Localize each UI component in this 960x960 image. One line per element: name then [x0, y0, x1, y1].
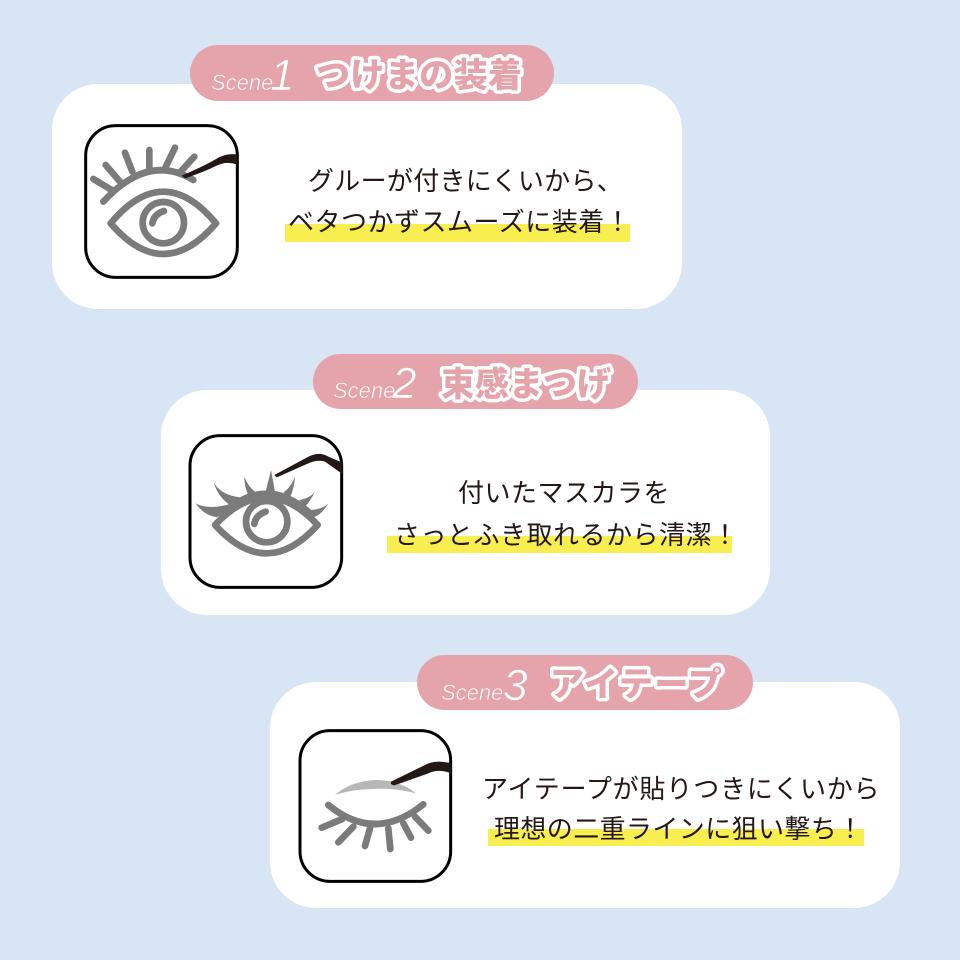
heading pill 2 [313, 354, 638, 409]
text block 2: 付いたマスカラを [458, 478, 670, 508]
panel: scene 1 [52, 45, 682, 309]
card 1 [52, 84, 682, 309]
panel: scene 3 [270, 655, 900, 908]
heading pill 1: つけまの装着 [316, 57, 522, 95]
heading pill 3: 3 [503, 661, 528, 710]
text block 1: グルーが付きにくいから、 [308, 166, 623, 196]
heading pill 3: Scene [441, 680, 503, 705]
icon: open eye with applicator [86, 126, 237, 277]
text block 3 [482, 774, 880, 846]
text block 1 [285, 166, 631, 242]
card 3 [270, 682, 900, 908]
heading pill 2: 束感まつげ [441, 365, 611, 404]
heading pill 3: アイテープ [550, 666, 722, 704]
heading pill 1 [190, 45, 554, 101]
heading pill 2: 2 [391, 359, 416, 408]
card 2 [161, 390, 770, 615]
panel: scene 2 [161, 354, 770, 615]
heading pill 2: Scene [333, 378, 395, 403]
text block 2: さっとふき取れるから清潔！ [394, 520, 739, 550]
text block 1: ベタつかずスムーズに装着！ [288, 207, 631, 237]
icon: closed eye with eye tape [300, 731, 451, 881]
heading pill 3 [417, 655, 753, 710]
text block 3: アイテープが貼りつきにくいから [482, 774, 880, 804]
icon: eye with bundled lashes [190, 436, 342, 587]
heading pill 1: 1 [270, 51, 294, 100]
heading pill 1: Scene [211, 70, 273, 95]
text block 3: 理想の二重ラインに狙い撃ち！ [494, 814, 864, 844]
text block 2 [387, 478, 739, 553]
